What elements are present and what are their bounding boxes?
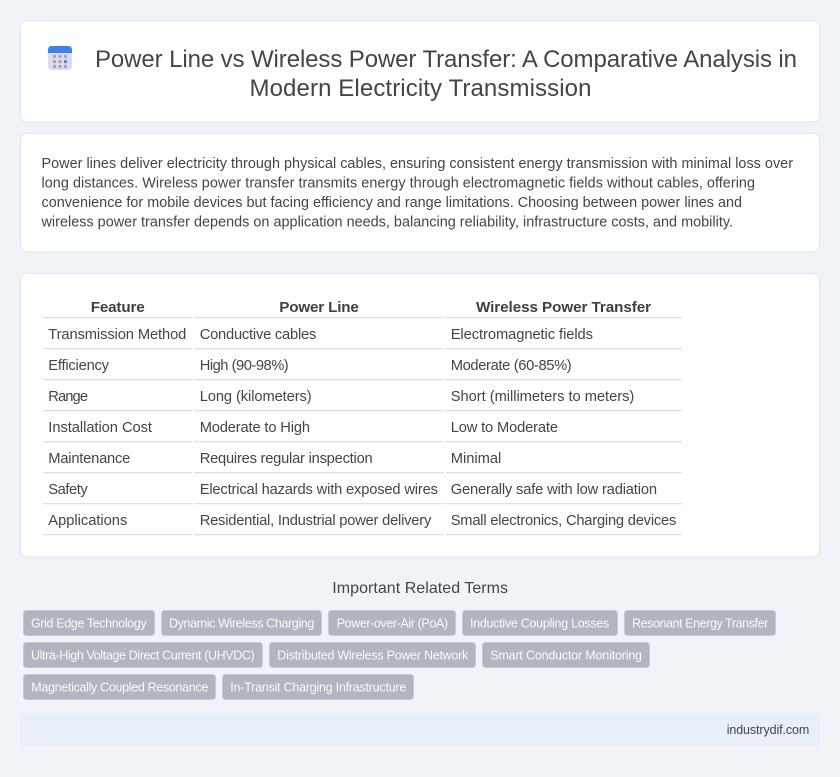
- row: range: Long (kilometers): [200, 389, 312, 405]
- heading: related terms: Important Related Terms: [332, 580, 508, 597]
- tag: Ultra-High Voltage Direct Current (UHVDC): [31, 648, 255, 662]
- table header: [91, 299, 651, 316]
- tag: [222, 674, 414, 700]
- row: safety: [48, 482, 657, 498]
- panel: related term tags: [24, 610, 776, 700]
- row: safety: Generally safe with low radiation: [451, 482, 657, 498]
- text block: summary: [40, 156, 793, 230]
- row: installation cost: Moderate to High: [200, 420, 310, 436]
- row: applications: Residential, Industrial power delivery: [200, 513, 432, 529]
- tag: [462, 610, 618, 636]
- tag: [270, 642, 476, 668]
- tag: Smart Conductor Monitoring: [490, 648, 642, 662]
- tag: [624, 610, 776, 636]
- row: efficiency: High (90-98%): [200, 358, 289, 374]
- icon: calendar: [48, 46, 72, 70]
- row: range: [48, 389, 634, 405]
- text block: summary: Power lines deliver electricity through physical cables, ensuring consistent energy transmission with minimal loss over: [42, 156, 793, 172]
- tag: Distributed Wireless Power Network: [277, 648, 469, 662]
- table header: Power Line: [279, 299, 359, 316]
- row: efficiency: Efficiency: [48, 358, 110, 374]
- tag: Magnetically Coupled Resonance: [31, 680, 208, 694]
- row: safety: Electrical hazards with exposed wires: [200, 482, 438, 498]
- row: applications: Applications: [48, 513, 127, 529]
- row: efficiency: [48, 358, 572, 374]
- tag: [328, 610, 456, 636]
- title: Power Line vs Wireless Power Transfer: A Comparative Analysis in: [95, 46, 797, 73]
- tag: [24, 610, 154, 636]
- panel: comparison table: [20, 274, 820, 557]
- row: transmission method: [48, 327, 593, 343]
- row: installation cost: Installation Cost: [48, 420, 152, 436]
- table header: Feature: [91, 299, 145, 316]
- row: range: Range: [48, 389, 88, 405]
- row: range: Short (millimeters to meters): [451, 389, 634, 405]
- table header: Wireless Power Transfer: [476, 299, 651, 316]
- row: maintenance: Minimal: [451, 451, 501, 467]
- tag: In-Transit Charging Infrastructure: [230, 680, 406, 694]
- row: transmission method: Conductive cables: [200, 327, 316, 343]
- tag: [162, 610, 322, 636]
- panel: header card: [20, 20, 820, 122]
- tag: [482, 642, 650, 668]
- tag: Resonant Energy Transfer: [632, 616, 768, 630]
- row: applications: Small electronics, Charging devices: [451, 513, 676, 529]
- tag: [24, 642, 262, 668]
- text block: summary: long distances. Wireless power transfer transmits energy through electromagnetic fields without cables, offering: [42, 176, 755, 192]
- row: efficiency: Moderate (60-85%): [451, 358, 572, 374]
- title: [95, 46, 797, 102]
- tag: Power-over-Air (PoA): [337, 616, 448, 630]
- title: Modern Electricity Transmission: [250, 75, 592, 102]
- tag: Grid Edge Technology: [31, 616, 147, 630]
- tag: Dynamic Wireless Charging: [169, 616, 314, 630]
- tag: [24, 674, 216, 700]
- text block: summary: convenience for mobile devices but facing efficiency and range limitations. Choosing between power lines and: [42, 195, 742, 211]
- row: transmission method: Transmission Method: [48, 327, 186, 343]
- footer: [20, 713, 820, 747]
- row: maintenance: Maintenance: [48, 451, 130, 467]
- row: maintenance: [48, 451, 501, 467]
- tag: Inductive Coupling Losses: [470, 616, 609, 630]
- panel: summary paragraph: [20, 134, 820, 252]
- row: maintenance: Requires regular inspection: [200, 451, 373, 467]
- row: transmission method: Electromagnetic fields: [451, 327, 593, 343]
- text block: summary: wireless power transfer depends on application needs, balancing reliability, infrastructure costs, and mobility.: [40, 214, 733, 230]
- row: installation cost: [48, 420, 558, 436]
- row: applications: [48, 513, 676, 529]
- footer: industrydif.com: [727, 723, 809, 737]
- row: safety: Safety: [48, 482, 88, 498]
- row: installation cost: Low to Moderate: [451, 420, 558, 436]
